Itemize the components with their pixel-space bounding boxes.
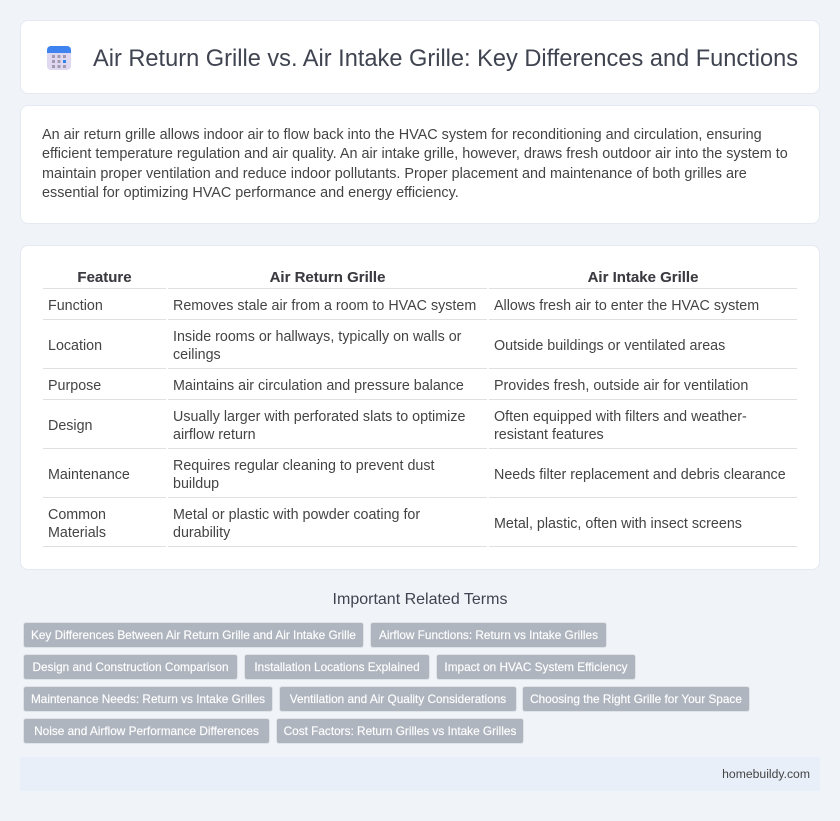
row: location: Outside buildings or ventilated areas <box>494 338 725 354</box>
row: design: resistant features <box>494 427 604 443</box>
tag: Maintenance Needs: Return vs Intake Grilles <box>31 692 265 706</box>
tag: Key Differences Between Air Return Grille and Air Intake Grille <box>31 628 356 642</box>
row: function: Allows fresh air to enter the HVAC system <box>494 298 759 314</box>
intro paragraph <box>42 127 788 201</box>
row: location: Inside rooms or hallways, typically on walls or <box>173 329 461 345</box>
tag: Cost Factors: Return Grilles vs Intake Grilles <box>284 724 516 738</box>
tag: Ventilation and Air Quality Considerations <box>290 692 506 706</box>
row: function: Function <box>48 298 103 314</box>
row: maintenance: buildup <box>173 476 219 492</box>
row: common materials: durability <box>173 525 230 541</box>
tag <box>244 654 430 680</box>
table header: Feature <box>77 269 132 286</box>
row: location: Location <box>48 338 102 354</box>
row: function: Removes stale air from a room to HVAC system <box>173 298 476 314</box>
tag: Design and Construction Comparison <box>32 660 229 674</box>
row: function <box>48 298 759 314</box>
row: design <box>48 409 747 443</box>
tag: Choosing the Right Grille for Your Space <box>530 692 742 706</box>
tag: Airflow Functions: Return vs Intake Grilles <box>379 628 598 642</box>
tag: Impact on HVAC System Efficiency <box>444 660 628 674</box>
header panel <box>20 20 820 94</box>
tag <box>23 718 270 744</box>
row: purpose: Purpose <box>48 378 101 394</box>
footer source: homebuildy.com <box>722 767 810 781</box>
tag <box>23 622 364 648</box>
intro text panel <box>20 105 820 224</box>
row: purpose <box>48 378 748 394</box>
row: design: Design <box>48 418 93 434</box>
table header <box>77 269 698 286</box>
row: maintenance: Maintenance <box>48 467 130 483</box>
intro paragraph: An air return grille allows indoor air to flow back into the HVAC system for reconditioning and circulation, ensuring <box>42 127 762 143</box>
table header: Air Intake Grille <box>588 269 698 286</box>
row: common materials <box>48 507 742 541</box>
row: purpose: Provides fresh, outside air for ventilation <box>494 378 748 394</box>
tag: Installation Locations Explained <box>254 660 420 674</box>
row: design: Usually larger with perforated slats to optimize <box>173 409 465 425</box>
title: Air Return Grille vs. Air Intake Grille: Key Differences and Functions <box>93 46 798 72</box>
row: maintenance <box>48 458 786 492</box>
tag: Noise and Airflow Performance Differences <box>34 724 259 738</box>
tag <box>23 654 238 680</box>
row: common materials: Common <box>48 507 106 523</box>
row: maintenance: Requires regular cleaning to prevent dust <box>173 458 434 474</box>
row: common materials: Materials <box>48 525 106 541</box>
row: location <box>48 329 725 363</box>
tag <box>279 686 517 712</box>
row: design: Often equipped with filters and weather- <box>494 409 747 425</box>
comparison table panel <box>20 245 820 570</box>
intro paragraph: essential for optimizing HVAC performance and energy efficiency. <box>42 185 459 201</box>
intro paragraph: efficient temperature regulation and air quality. An air intake grille, however, draws fresh outdoor air into the system to <box>42 146 788 162</box>
tag <box>23 686 273 712</box>
tag <box>436 654 636 680</box>
row: maintenance: Needs filter replacement and debris clearance <box>494 467 786 483</box>
footer bar <box>20 757 820 791</box>
tag <box>370 622 607 648</box>
tag <box>276 718 524 744</box>
icon: calendar <box>47 46 71 70</box>
intro paragraph: maintain proper ventilation and reduce indoor pollutants. Proper placement and maintenance of both grilles are <box>42 166 747 182</box>
tag <box>522 686 750 712</box>
row: location: ceilings <box>173 347 221 363</box>
table header: Air Return Grille <box>270 269 385 286</box>
related terms tags <box>23 622 750 744</box>
row: common materials: Metal, plastic, often with insect screens <box>494 516 742 532</box>
row: common materials: Metal or plastic with powder coating for <box>173 507 420 523</box>
related terms heading: Important Related Terms <box>333 591 507 608</box>
row: design: airflow return <box>173 427 256 443</box>
row: purpose: Maintains air circulation and pressure balance <box>173 378 464 394</box>
